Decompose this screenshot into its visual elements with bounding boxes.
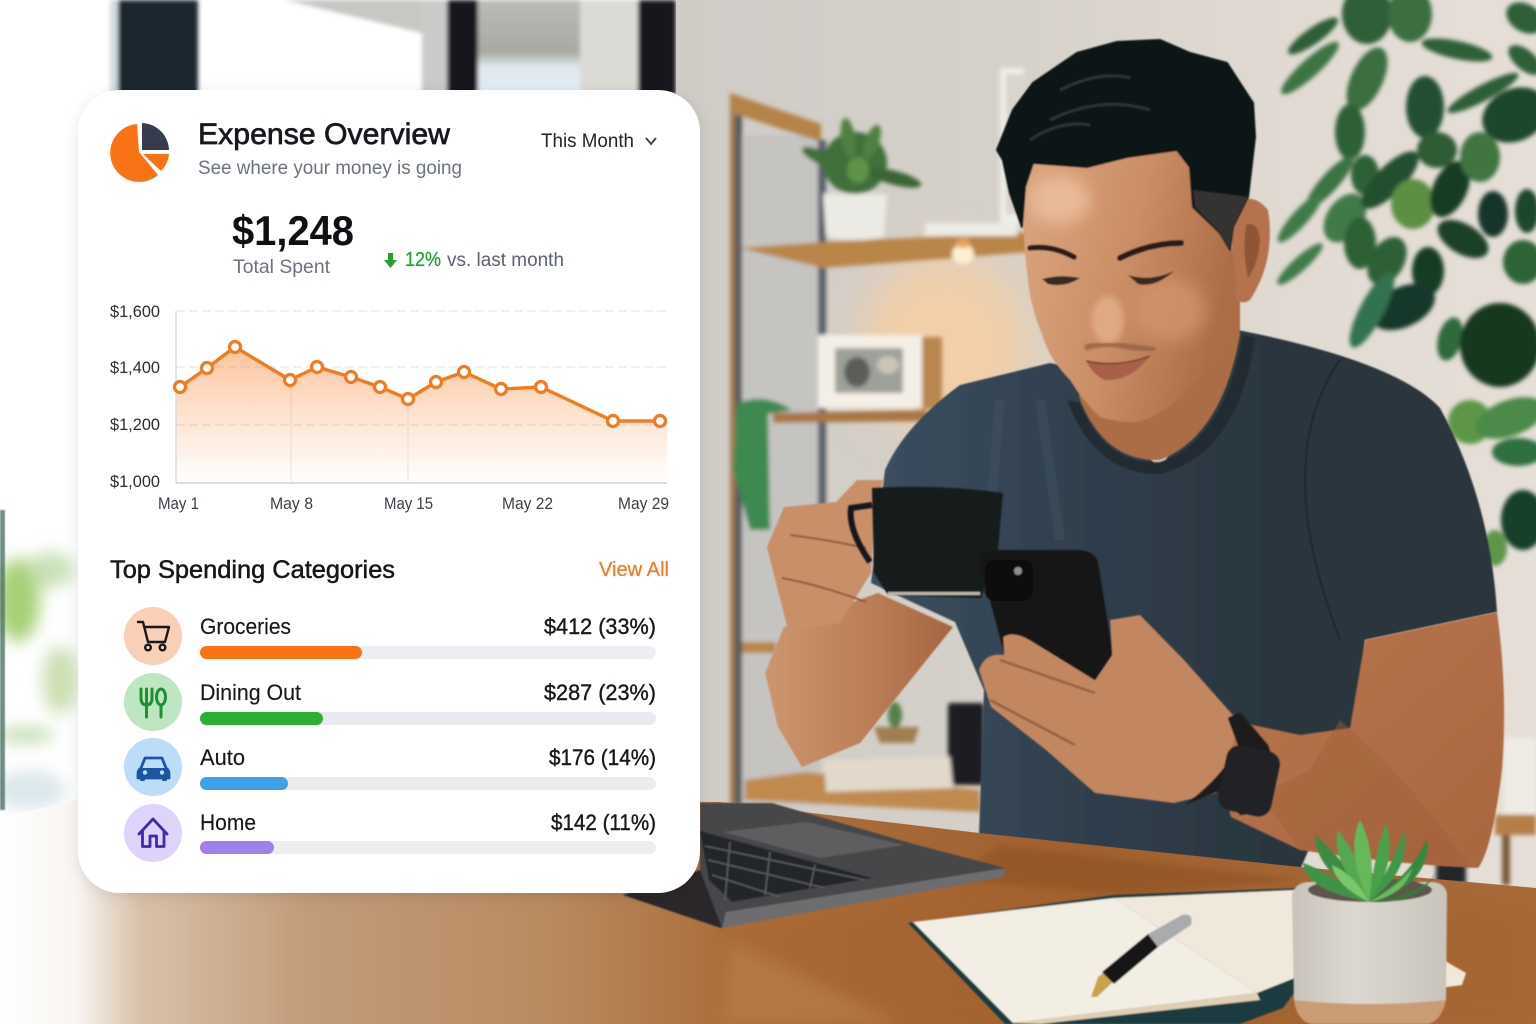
- nose and moustache shadow: [1085, 344, 1155, 350]
- total spent stat: Total Spent: [233, 256, 331, 278]
- icon: fork and spoon: [141, 689, 166, 717]
- category: auto: [124, 738, 656, 796]
- category: groceries: Groceries: [200, 614, 291, 639]
- pot and small plant: [823, 194, 887, 240]
- x axis labels: May 29: [618, 495, 669, 513]
- x axis labels: [158, 495, 669, 513]
- icon: car: [138, 758, 169, 781]
- y axis labels: [110, 302, 160, 491]
- laptop: [623, 803, 1005, 928]
- total spent stat: [232, 207, 354, 278]
- y axis labels: $1,200: [110, 415, 160, 434]
- picture frame: [915, 337, 942, 409]
- x axis labels: May 22: [502, 495, 553, 513]
- panel: expense overview card: [78, 90, 700, 893]
- category: auto: $176 (14%): [549, 745, 656, 770]
- comparison to last month: vs. last month: [447, 249, 564, 271]
- y axis labels: $1,600: [110, 302, 160, 321]
- chart line: [180, 347, 660, 421]
- period dropdown: This Month: [541, 131, 634, 152]
- window area: [0, 0, 690, 840]
- pen: [1091, 914, 1192, 997]
- face highlights and shadows: [1030, 176, 1090, 224]
- icon: shopping cart: [138, 622, 169, 650]
- wall: [676, 0, 1536, 900]
- header: [110, 118, 656, 182]
- category: dining out: Dining Out: [200, 680, 301, 705]
- total spent stat: $1,248: [232, 207, 354, 254]
- eyes: [1042, 276, 1080, 285]
- mouth: [1086, 356, 1150, 380]
- hair: [997, 40, 1255, 250]
- x axis labels: May 8: [270, 495, 313, 513]
- y axis labels: $1,000: [110, 472, 160, 491]
- category: dining out: $287 (23%): [544, 680, 656, 705]
- notebook: [908, 888, 1466, 1024]
- back shelf behind table at right: [1436, 738, 1536, 885]
- table: [0, 800, 1536, 1024]
- comparison to last month: 12%: [405, 249, 441, 271]
- phone: [978, 550, 1114, 697]
- left arm and hand: [765, 480, 953, 767]
- category: dining out: [124, 673, 656, 731]
- hand holding phone: [979, 615, 1240, 803]
- icon: house: [139, 819, 167, 846]
- x axis labels: May 1: [158, 495, 199, 513]
- chart area fill: [176, 347, 667, 483]
- man: shirt: [871, 330, 1497, 870]
- icon: pie chart: [110, 123, 169, 182]
- category: home: $142 (11%): [551, 810, 656, 835]
- line chart: [110, 302, 669, 513]
- category: groceries: $412 (33%): [544, 614, 656, 639]
- coffee mug: [851, 487, 1003, 598]
- blurred greenery at left: [0, 510, 78, 810]
- warm wall glow: [860, 255, 1030, 435]
- table reflections: [720, 845, 1536, 1024]
- man: neck and head: [997, 40, 1270, 460]
- subtitle: See where your money is going: [198, 157, 462, 179]
- eyebrows: [1030, 247, 1074, 257]
- comparison to last month: [384, 249, 564, 271]
- large plant at right: [1273, 0, 1536, 566]
- title: Expense Overview: [198, 118, 450, 151]
- category: groceries: [124, 607, 656, 665]
- hanging plant on shelf: [733, 399, 792, 530]
- heading: top spending categories: Top Spending Categories: [110, 556, 395, 584]
- potted succulent: [1292, 820, 1447, 1024]
- shelving unit: [730, 68, 1030, 812]
- category: home: Home: [200, 810, 256, 835]
- view all link: View All: [599, 559, 669, 581]
- category: auto: Auto: [200, 745, 245, 770]
- y axis labels: $1,400: [110, 358, 160, 377]
- shelf clutter: [948, 703, 984, 785]
- chart data points: [174, 342, 666, 426]
- right arm: [1205, 612, 1504, 868]
- smartwatch: [1185, 712, 1282, 819]
- x axis labels: May 15: [384, 495, 433, 513]
- category: home: [124, 804, 656, 862]
